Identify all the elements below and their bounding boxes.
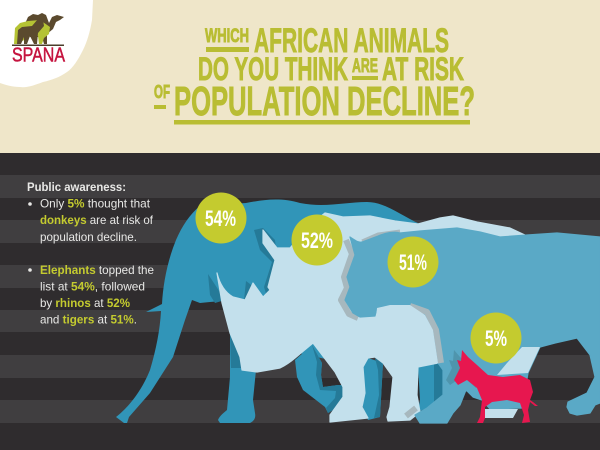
logo: SPANA <box>0 0 93 87</box>
text block: public awareness: and tigers at 51%. <box>40 314 137 326</box>
tiger <box>345 228 600 423</box>
tiger shadow <box>341 240 358 318</box>
title: ARE <box>352 56 378 77</box>
badge: 51% <box>388 236 438 288</box>
text block: public awareness: population decline. <box>40 231 137 244</box>
icon: donkey <box>454 350 538 423</box>
text block: public awareness: donkeys are at risk of <box>40 214 154 227</box>
badge: 5%: 5% <box>485 326 507 351</box>
badge: 52%: 52% <box>301 228 333 253</box>
badge: 52% <box>292 214 342 266</box>
badge: 54%: 54% <box>205 206 236 231</box>
logo: SPANA: SPANA <box>12 44 66 66</box>
rhino <box>217 213 525 422</box>
text block: public awareness: by rhinos at 52% <box>40 297 130 310</box>
badge: 54% <box>196 192 246 244</box>
title: AT RISK <box>382 51 464 87</box>
rhino shadow on tiger <box>406 306 441 416</box>
rhino lobe in front of tiger <box>375 305 438 367</box>
elephant <box>116 200 443 423</box>
panel: dark striped background <box>0 153 600 450</box>
badge: 5% <box>470 312 522 364</box>
text block: public awareness: list at 54%, followed <box>40 280 145 294</box>
text block: public awareness: Elephants topped the <box>40 264 154 277</box>
title: AFRICAN ANIMALS <box>254 22 449 60</box>
title: DO YOU THINK <box>198 51 348 87</box>
title: OF <box>154 82 170 102</box>
text block: public awareness: Only 5% thought that <box>40 198 151 210</box>
title: WHICH <box>205 26 249 47</box>
title <box>154 22 475 124</box>
donkey shadow <box>446 350 480 388</box>
rhino patches behind donkey <box>484 347 540 418</box>
badge: 51%: 51% <box>399 250 427 275</box>
text block: public awareness: Public awareness: <box>27 181 126 194</box>
panel: cream header background <box>0 0 600 153</box>
text block: public awareness <box>27 181 154 326</box>
tiger top shadow <box>362 231 400 241</box>
